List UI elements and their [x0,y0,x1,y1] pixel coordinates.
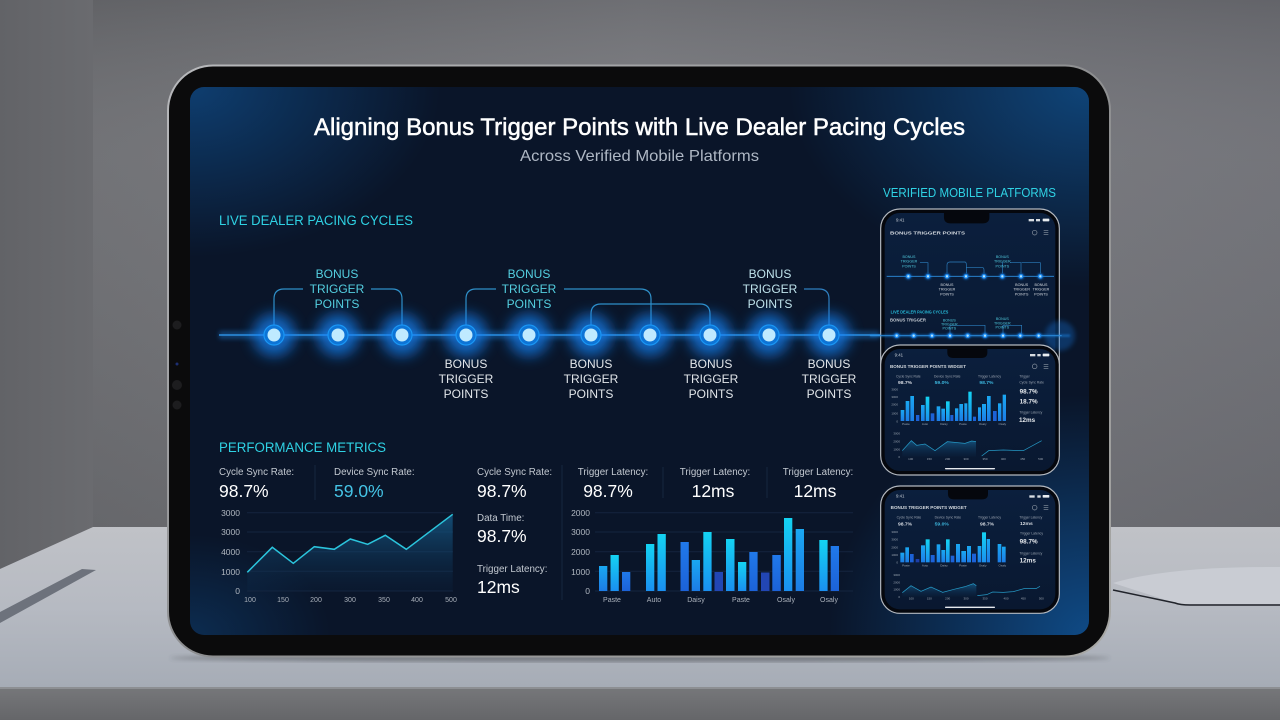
phone 2 metrics: Trigger [1019,374,1031,378]
timeline [219,267,880,401]
phone 1 lower timeline: TRIGGER [994,321,1011,325]
phone 2 line chart: 1000 [893,447,900,451]
metric: trigger latency ms: 12ms [692,481,735,501]
upper trigger labels: TRIGGER [743,282,798,296]
phone 1 lower timeline: BONUS [996,317,1009,321]
phone 1 upper timeline: POINTS [996,264,1010,268]
phone 3 line chart: 0 [898,595,900,599]
phone 3 line chart: 150 [927,597,932,601]
bar chart x axis: Auto [647,597,661,604]
metric: data time: Data Time: [477,513,524,524]
phone 2 home bar [945,468,995,469]
bar chart y axis [571,508,590,596]
phone 1: timeline view [870,209,1075,396]
metric: trigger latency ms: Trigger Latency: [680,467,750,478]
phone 1 upper timeline: BONUS [902,255,916,259]
phone 3 metrics: Trigger Latency [1020,531,1043,535]
phone 2 line chart: 350 [983,457,988,461]
lower trigger labels: TRIGGER [684,372,739,386]
phone 3 bar chart: 3000 [891,530,898,534]
phone 1 lower timeline [870,317,1075,351]
phone 2 line chart: 0 [898,455,900,459]
phone 1 upper timeline: BONUS [940,283,954,287]
phone 3 metrics: Device Sync Rate [935,516,961,520]
phone 2: metrics view: 18.7% [1020,398,1038,405]
phone 1 icons [1032,230,1048,235]
bar chart y axis: 3000 [571,527,590,537]
phone 2 bar chart: Osaly [999,422,1007,426]
line chart x axis [244,597,457,604]
phone 3 icons [1032,505,1048,510]
phone 3 home bar [945,607,995,608]
phone 3 body [881,486,1059,613]
metric: cycle sync rate 2: 98.7% [477,481,527,501]
phone 3 bar chart: Paste [959,563,967,567]
heading: live dealer pacing cycles: LIVE DEALER PACING CYCLES [219,213,413,228]
line chart y axis: 0 [235,586,240,596]
phone 2 bar chart: Osaly [979,422,987,426]
bars [599,518,839,591]
phone 2 bar chart: Auto [922,422,928,426]
phone 1 upper timeline: TRIGGER [939,288,956,292]
phone 2 metrics: Trigger Latency [978,374,1001,378]
heading: performance metrics: PERFORMANCE METRICS [219,440,386,455]
phone 3 bar chart: 1000 [891,553,898,557]
metric: trigger latency ms [680,467,750,501]
phone 3 line chart: 350 [983,597,988,601]
phone 2 bar chart: 3000 [891,395,898,399]
phone 2 line chart: 3000 [893,432,900,436]
phone 3 line chart: 100 [909,597,914,601]
lower trigger labels: TRIGGER [439,372,494,386]
upper trigger labels: POINTS [748,297,792,311]
phone 2: metrics view: 59.0% [935,380,949,386]
phone 3: metrics view: 98.7% [980,521,995,527]
bar chart x axis: Paste [732,597,750,604]
line chart x axis: 350 [378,597,390,604]
round dock on desk [1113,567,1280,605]
upper trigger labels: BONUS [316,267,358,281]
line chart y axis: 3000 [221,527,240,537]
phone 2 metrics: Cycle Sync Rate [896,374,921,378]
phone 3: metrics view: 98.7% [1020,538,1038,545]
phone 3 line chart: 1000 [893,587,900,591]
line chart y axis: 3000 [221,508,240,518]
phone 2 metrics: Device Sync Rate [934,374,961,378]
lower trigger labels: POINTS [569,387,613,401]
metric: device sync rate: 59.0% [334,481,384,501]
phone 1 upper timeline: TRIGGER [1013,288,1030,292]
phone 3 bar chart: Osaly [979,563,987,567]
phone 1 lower heading: LIVE DEALER PACING CYCLES [891,310,948,315]
phone 1 upper timeline: POINTS [902,264,916,268]
phone 1 upper timeline: TRIGGER [901,260,918,264]
phone 2 bar chart: 0 [896,419,898,423]
phone 1 lower sublabel: BONUS TRIGGER [890,317,927,322]
phone 1 lower timeline: TRIGGER [941,322,958,326]
metric: trigger latency percent [578,467,648,501]
title: Aligning Bonus Trigger Points with Live Dealer Pacing Cycles [314,114,965,141]
phone 3 metrics: Cycle Sync Rate [897,516,921,520]
metric: trigger latency: 12ms [477,577,520,597]
phone 3 bar chart: Osaly [999,563,1007,567]
upper trigger labels: BONUS [749,267,791,281]
upper trigger labels: POINTS [315,297,359,311]
phone 1 upper timeline: BONUS [1015,283,1029,287]
lower trigger labels: BONUS [570,357,612,371]
phone 1 lower timeline: POINTS [943,326,957,330]
phone 1 upper timeline: POINTS [940,292,954,296]
phone 2 metrics: Cycle Sync Rate [1019,381,1044,385]
phone 3 bar chart: 2000 [891,545,898,549]
metric: cycle sync rate [219,467,294,501]
upper trigger labels [310,267,798,311]
phone 2 metrics [896,374,1044,415]
lower trigger labels: POINTS [689,387,733,401]
phone 2 line chart: 450 [1020,457,1025,461]
phone 2 body [881,345,1059,475]
line chart y axis: 4000 [221,547,240,557]
phone 1 upper timeline: BONUS [1034,283,1048,287]
metric: data time: 98.7% [477,526,527,546]
phone 3: metrics view [881,486,1059,613]
background wall [0,0,1280,569]
phone 3 line chart [893,573,1044,601]
phone 2 line chart [893,432,1043,461]
phone 1 lower timeline: POINTS [996,326,1010,330]
phone 3 bar chart: Paste [902,563,910,567]
metric: trigger latency ms 2: Trigger Latency: [783,467,853,478]
phone 2: metrics view: 98.7% [898,380,913,386]
phone 2 line chart: 400 [1001,457,1006,461]
line chart x axis: 150 [277,597,289,604]
phone 3 line chart: 400 [1004,597,1009,601]
tablet shadow [170,654,1110,662]
phone 3 line chart: 2000 [893,580,900,584]
phone 2 line chart: 100 [908,457,913,461]
phone 2 bar chart: Daisy [940,422,948,426]
phone 3: metrics view: 12ms [1020,557,1036,564]
phone 3 status: 9:41 [896,494,905,499]
phone 3: metrics view: 12ms [1020,521,1033,527]
phone 1 status: 9:41 [896,218,905,223]
timeline axis [219,331,880,339]
phone 2 bar chart: 1000 [891,412,898,416]
desk surface [0,527,1280,720]
phone 3 heading: BONUS TRIGGER POINTS WIDGET [891,505,967,511]
lower trigger labels: POINTS [807,387,851,401]
upper trigger labels: TRIGGER [310,282,365,296]
connector brackets [274,289,829,326]
metric: device sync rate [334,467,415,501]
lower trigger labels [439,357,857,401]
phone 3 metrics [897,516,1043,556]
metric: cycle sync rate: Cycle Sync Rate: [219,467,294,478]
phone 3 line chart: 500 [1039,597,1044,601]
upper trigger labels: BONUS [508,267,550,281]
heading: verified mobile platforms: VERIFIED MOBILE PLATFORMS [883,185,1056,200]
phone 2 heading: BONUS TRIGGER POINTS WIDGET [890,364,966,370]
phone 3 metrics: Trigger Latency [1019,516,1043,520]
front camera and sensors [172,320,182,410]
phone 1 upper timeline [887,255,1054,296]
phone 3 metrics: Trigger Latency [978,516,1001,520]
phone 2 line chart: 200 [945,457,950,461]
lower trigger labels: TRIGGER [564,372,619,386]
phone 2 bar chart: Paste [959,422,967,426]
phone 3: metrics view: 59.0% [935,521,949,527]
metric: device sync rate: Device Sync Rate: [334,467,415,478]
metric: trigger latency [477,564,547,597]
phone 3 bar chart: Daisy [940,563,948,567]
phone 1 upper timeline: TRIGGER [994,260,1011,264]
tablet bezel [169,66,1109,656]
metric: trigger latency percent: Trigger Latency: [578,467,648,478]
phone 2 line chart: 500 [1038,457,1043,461]
bar chart y axis: 2000 [571,508,590,518]
upper trigger labels: TRIGGER [502,282,557,296]
phone 2: metrics view: 98.7% [1020,388,1038,395]
phone 1 lower timeline: BONUS [943,318,956,322]
metric: data time [477,513,527,546]
phone 3 line chart: 3000 [893,573,900,577]
phone 2 metrics: Trigger Latency [1019,411,1043,415]
upper trigger labels: POINTS [507,297,551,311]
lower trigger labels: BONUS [690,357,732,371]
phone 2 icons [1032,364,1048,369]
bar chart [571,508,853,604]
phone 3 line chart: 300 [964,597,969,601]
line chart x axis: 300 [344,597,356,604]
phone 2 status: 9:41 [895,352,904,357]
phone 3 line chart: 450 [1021,597,1026,601]
phone 1 heading: BONUS TRIGGER POINTS [890,230,966,236]
phone 1 upper timeline: POINTS [1034,292,1048,296]
subtitle: Across Verified Mobile Platforms [520,148,759,165]
metric: trigger latency ms 2 [783,467,853,501]
phone 2 line chart: 2000 [893,439,900,443]
phone 3 line chart: 200 [945,597,950,601]
bar chart y axis: 1000 [571,567,590,577]
line chart x axis: 400 [411,597,423,604]
timeline nodes [253,314,850,356]
tablet screen [190,87,1089,635]
metric: trigger latency percent: 98.7% [583,481,633,501]
phone 3: metrics view: 98.7% [898,521,913,527]
phone 2: metrics view [881,345,1059,475]
phone 1 body [881,209,1059,396]
metric: cycle sync rate 2 [477,467,552,501]
phone 3 metrics: Trigger Latency [1019,552,1043,556]
phone 3 bar chart: 3000 [891,538,898,542]
lower trigger labels: BONUS [445,357,487,371]
line chart y axis [221,508,240,596]
phone 1 upper timeline: POINTS [1015,292,1029,296]
lower trigger labels: TRIGGER [802,372,857,386]
lower trigger labels: BONUS [808,357,850,371]
phone 2: metrics view: 98.7% [979,380,994,386]
line chart x axis: 200 [310,597,322,604]
phone 2 line chart: 300 [964,457,969,461]
phone 1 upper timeline: BONUS [996,255,1009,259]
bar chart x axis [603,597,838,604]
line chart [221,508,457,604]
bar chart x axis: Osaly [820,597,838,604]
phone 2 bar chart: 2000 [891,403,898,407]
lower trigger labels: POINTS [444,387,488,401]
desk slot [0,569,96,623]
phone 2 bar chart: Paste [902,422,910,426]
line chart x axis: 500 [445,597,457,604]
bar chart x axis: Paste [603,597,621,604]
bar chart x axis: Daisy [687,597,705,604]
phone 1 upper timeline: TRIGGER [1033,288,1050,292]
phone 2 bar chart [891,387,1007,426]
line chart y axis: 1000 [221,567,240,577]
metric cards [219,465,853,600]
phone 2 line chart: 150 [927,457,932,461]
phone 2: metrics view: 12ms [1019,417,1036,424]
bar chart y axis: 2000 [571,547,590,557]
phone 3 bar chart: 0 [896,561,898,565]
bar chart x axis: Osaly [777,597,795,604]
tablet [167,64,1111,658]
metric: cycle sync rate: 98.7% [219,481,269,501]
metric: cycle sync rate 2: Cycle Sync Rate: [477,467,552,478]
phone 3 bar chart: Auto [922,563,928,567]
bar chart y axis: 0 [585,586,590,596]
line chart x axis: 100 [244,597,256,604]
phone 3 bar chart [891,530,1007,567]
phone 2 bar chart: 3000 [891,387,898,391]
tablet frame [167,64,1111,658]
metric: trigger latency: Trigger Latency: [477,564,547,575]
metric: trigger latency ms 2: 12ms [794,481,837,501]
